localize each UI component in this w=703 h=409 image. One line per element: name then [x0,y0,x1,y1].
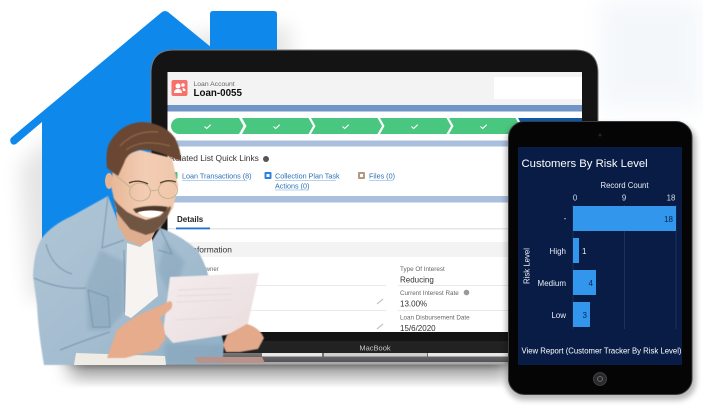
x axis labels [573,194,675,202]
right fields: 15/6/2020 [400,324,436,333]
document text [175,288,232,320]
icon: edit pencils [377,299,383,329]
left hand [107,301,172,358]
icon: loan account [172,80,188,96]
shirt shading [86,240,222,364]
beard [113,198,171,235]
denim shirt [33,196,224,365]
house shadow [20,25,290,300]
smile [138,210,163,217]
x axis title: Record Count [600,181,649,190]
quick links heading: Related List Quick Links [169,153,259,163]
information section heading: Loan Information [169,244,232,254]
icon: camera [598,134,602,136]
laptop base [165,353,595,364]
right hand [223,324,264,352]
chart title: Customers By Risk Level [522,158,648,170]
record name: Loan-0055 [194,88,243,99]
left fields [168,267,386,329]
tablet body [508,122,692,394]
bar chart: customers by risk level [522,181,676,329]
hair [106,122,181,176]
right fields: Loan Disbursement Date [400,314,470,322]
ear [105,173,113,189]
shirt folds [34,196,172,350]
x axis labels: 0 [573,194,578,202]
face [111,150,178,235]
details tab: Details [177,215,204,224]
right fields: Current Interest Rate [400,290,459,297]
bar: high 1 [550,238,587,263]
laptop [151,50,598,364]
laptop brand: MacBook [359,344,391,352]
document [163,273,259,343]
bar: high 1: 1 [582,247,587,256]
bar: high 1: High [550,247,566,256]
link: collection plan task actions: Actions (0) [275,182,309,190]
icon: home button [594,372,606,386]
record header [168,72,582,105]
bar: none 18 [564,206,676,231]
progress path [168,112,582,140]
laptop screen [168,72,582,333]
link: collection plan task actions [264,172,340,190]
tablet [506,122,696,400]
neck [116,212,158,246]
hair strands [120,132,170,150]
closed laptop on desk [194,357,265,363]
bar: low 3: Low [551,311,566,320]
ground shadow [70,362,510,388]
bar: medium 4 [538,270,596,295]
right fields [398,266,582,333]
left fields: Loan Owner [186,267,219,273]
right fields: 13.00% [400,300,427,308]
link: collection plan task actions: Collection Plan Task [275,172,340,180]
newspaper [74,353,166,365]
bar: medium 4: Medium [538,279,566,288]
bar: none 18: 18 [664,215,674,224]
x axis labels: 9 [622,194,626,202]
information section heading [168,242,582,257]
x axis labels: 18 [667,194,675,202]
bar: medium 4: 4 [589,279,594,288]
icon: blue house [10,11,300,270]
white t-shirt [125,238,158,318]
y axis title: Risk Level [522,248,532,284]
eyebrows [129,181,176,184]
link: loan transactions: Loan Transactions (8) [182,172,252,180]
laptop bezel [151,50,598,353]
header action box [494,77,582,99]
man reading a document [33,122,265,365]
link: files: Files (0) [369,172,395,180]
right fields: Type Of Interest [400,266,445,273]
bar: low 3: 3 [583,311,588,320]
record type: Loan Account [194,81,235,88]
right fields: Reducing [400,276,434,284]
bar: low 3 [551,302,590,327]
tablet shadow [506,124,696,400]
icon: info [263,156,269,162]
report link: View Report (Customer Tracker By Risk Level) [522,346,682,356]
bar: none 18: - [564,214,567,223]
tablet screen [518,147,682,365]
glasses [114,174,178,201]
quick links [169,153,395,190]
